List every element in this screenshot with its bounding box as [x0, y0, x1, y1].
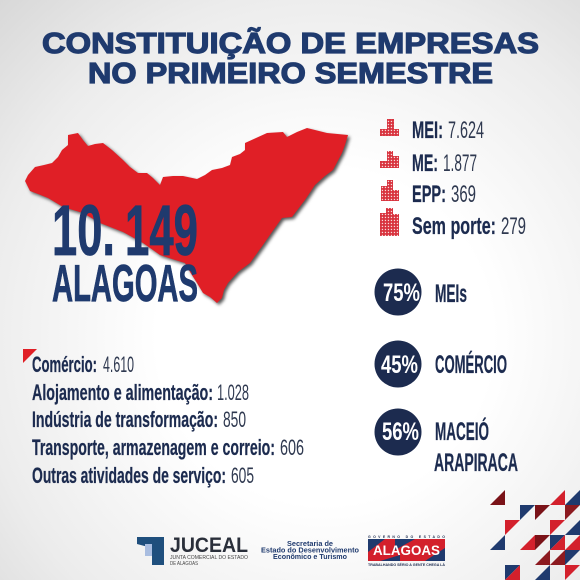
logo: Secretaria: Estado do Desenvolvimento — [261, 546, 359, 554]
sector: transporte: 606 — [280, 435, 304, 460]
icon: Sem porte building — [380, 208, 399, 236]
total figure: 149 — [125, 192, 198, 271]
icon: MEI building — [380, 119, 399, 136]
logo: JUCEAL — [137, 534, 248, 567]
stat: 45% comércio — [374, 340, 507, 388]
panel: company sizes — [380, 117, 526, 240]
title — [42, 26, 539, 90]
logo: JUCEAL: DE ALAGOAS — [170, 561, 199, 567]
Sem porte count: 279 — [501, 213, 526, 240]
panel: sectors list — [23, 349, 304, 488]
sector: outras: Outras atividades de serviço: — [32, 463, 226, 488]
ME count: 1.877 — [443, 150, 477, 177]
sector: outras: 605 — [231, 463, 254, 488]
stat: 56% Maceió Arapiraca — [374, 408, 518, 477]
logo: Secretaria — [261, 539, 359, 561]
stat: 56% Maceió Arapiraca: MACEIÓ — [435, 416, 489, 446]
sector: transporte: Transporte, armazenagem e correio: — [32, 435, 275, 460]
panel: percentages — [374, 268, 518, 477]
icon: red corner triangle — [23, 349, 37, 363]
total figure — [52, 192, 198, 313]
logo: Secretaria: Secretaria de — [287, 539, 333, 548]
sector: comércio: 4.610 — [103, 352, 134, 377]
MEI count: MEI: — [412, 117, 443, 144]
map of Alagoas — [25, 128, 348, 303]
icon: ME building — [380, 151, 399, 168]
sector: comércio: Comércio: — [32, 352, 97, 377]
sector: indústria: 850 — [223, 407, 246, 432]
logo: JUCEAL: JUNTA COMERCIAL DO ESTADO — [170, 555, 248, 561]
icon: EPP building — [381, 180, 399, 201]
sector: indústria: Indústria de transformação: — [32, 407, 218, 432]
sector: alojamento: 1.028 — [217, 380, 249, 405]
stat: 45% comércio: COMÉRCIO — [435, 350, 507, 379]
stat: 75% MEIs: 75% — [383, 279, 420, 307]
logo: JUCEAL: JUCEAL — [170, 534, 248, 557]
title: NO PRIMEIRO SEMESTRE — [88, 58, 493, 90]
logo: Governo de Alagoas: TRABALHANDO SÉRIO A GENTE CHEGA LÁ — [368, 562, 445, 567]
stat: 75% MEIs — [374, 268, 467, 316]
stat: 56% Maceió Arapiraca: ARAPIRACA — [434, 449, 518, 477]
sector: alojamento: Alojamento e alimentação: — [32, 380, 213, 405]
total figure: 10. — [52, 192, 115, 271]
EPP count: EPP: — [412, 181, 446, 208]
MEI count: 7.624 — [448, 117, 484, 144]
logo: Governo de Alagoas: GOVERNO DO ESTADO — [368, 535, 445, 539]
title: CONSTITUIÇÃO DE EMPRESAS — [42, 26, 539, 60]
EPP count: 369 — [451, 181, 476, 208]
logo: Governo de Alagoas: ALAGOAS — [373, 542, 440, 558]
Sem porte count: Sem porte: — [412, 213, 496, 240]
logo: Secretaria: Econômico e Turismo — [273, 552, 347, 561]
stat: 56% Maceió Arapiraca: 56% — [382, 418, 419, 446]
stat: 45% comércio: 45% — [381, 351, 418, 379]
total figure: ALAGOAS — [52, 255, 198, 313]
stat: 75% MEIs: MEIs — [435, 280, 467, 308]
ME count: ME: — [412, 150, 438, 177]
ME count — [412, 150, 477, 177]
decorative triangles corner — [490, 490, 580, 580]
logo: Governo de Alagoas — [368, 535, 445, 567]
